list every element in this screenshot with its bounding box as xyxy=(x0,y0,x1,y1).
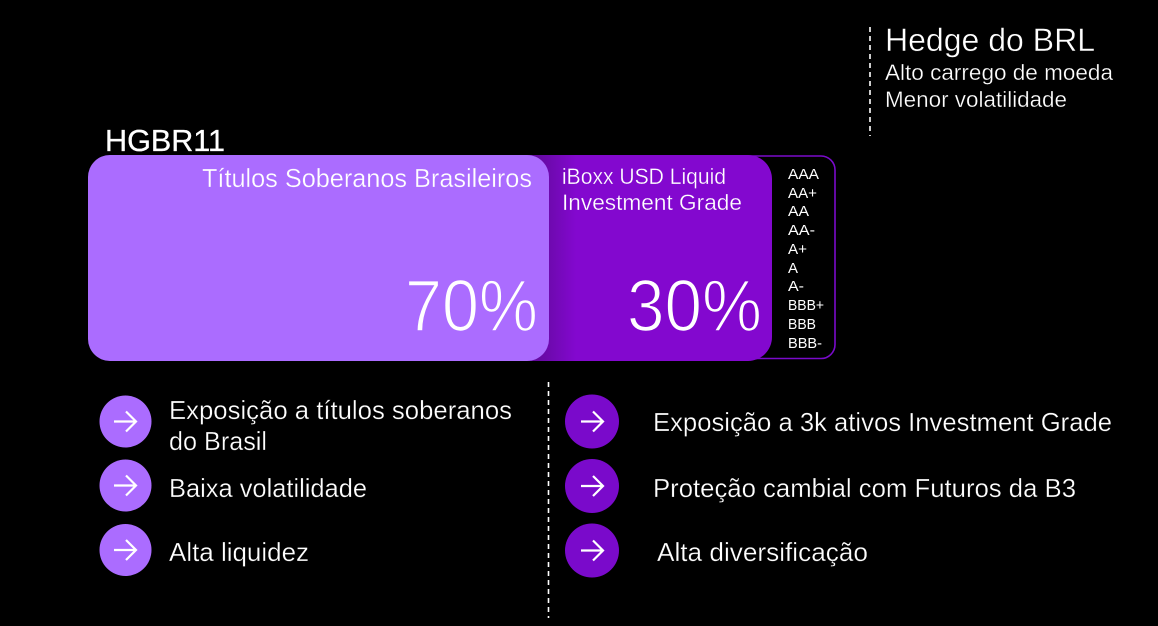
icon: arrow xyxy=(565,459,619,513)
rating list: A- xyxy=(788,278,804,295)
item text xyxy=(169,395,512,456)
icon: arrow xyxy=(100,396,152,448)
item text: Baixa volatilidade xyxy=(169,473,367,503)
item text: Alta liquidez xyxy=(169,537,309,567)
panel label: Títulos Soberanos Brasileiros xyxy=(202,163,532,193)
callout line: volatility: Menor volatilidade xyxy=(885,87,1067,112)
rating list xyxy=(788,166,824,352)
percentage: 30%: 30% xyxy=(627,266,762,347)
item: high diversification xyxy=(565,524,868,578)
title: HGBR11 xyxy=(105,123,225,158)
right list: investment grade benefits xyxy=(565,394,1112,578)
item text: Exposição a títulos soberanos xyxy=(169,395,512,425)
rating list: AAA xyxy=(788,166,819,183)
icon: arrow xyxy=(100,524,152,576)
item: currency protection xyxy=(565,459,1076,513)
panel label: iBoxx USD Liquid xyxy=(562,164,726,189)
rating list: A xyxy=(788,260,798,277)
item: low volatility xyxy=(100,460,367,512)
panel label: Investment Grade xyxy=(562,190,742,215)
percentage: 70%: 70% xyxy=(405,266,538,347)
rating list: BBB xyxy=(788,316,816,333)
panel: iBoxx 30% xyxy=(500,155,772,361)
item text: Exposição a 3k ativos Investment Grade xyxy=(653,407,1112,437)
item text: Proteção cambial com Futuros da B3 xyxy=(653,473,1076,503)
panel label xyxy=(562,164,742,215)
rating list: AA+ xyxy=(788,185,817,202)
rating list: AA xyxy=(788,203,809,220)
icon: arrow xyxy=(565,524,619,578)
callout line: currency carry: Alto carrego de moeda xyxy=(885,60,1114,85)
panel: credit ratings xyxy=(735,156,835,358)
hedge callout xyxy=(870,22,1114,136)
item: sovereign exposure xyxy=(100,395,512,456)
icon: arrow xyxy=(565,394,619,448)
allocation bar xyxy=(88,155,835,361)
rating list: BBB- xyxy=(788,335,822,352)
rating list: BBB+ xyxy=(788,297,824,314)
icon: arrow xyxy=(100,460,152,512)
item: high liquidity xyxy=(100,524,309,576)
item text: Alta diversificação xyxy=(657,537,868,567)
item: investment grade exposure xyxy=(565,394,1112,448)
left list: sovereign bond benefits xyxy=(100,395,512,576)
panel: Brazilian sovereign bonds 70% xyxy=(88,155,549,361)
rating list: AA- xyxy=(788,222,815,239)
rating list: A+ xyxy=(788,241,807,258)
callout heading: Hedge do BRL xyxy=(885,22,1095,58)
item text: do Brasil xyxy=(169,426,267,456)
column divider xyxy=(548,382,550,618)
